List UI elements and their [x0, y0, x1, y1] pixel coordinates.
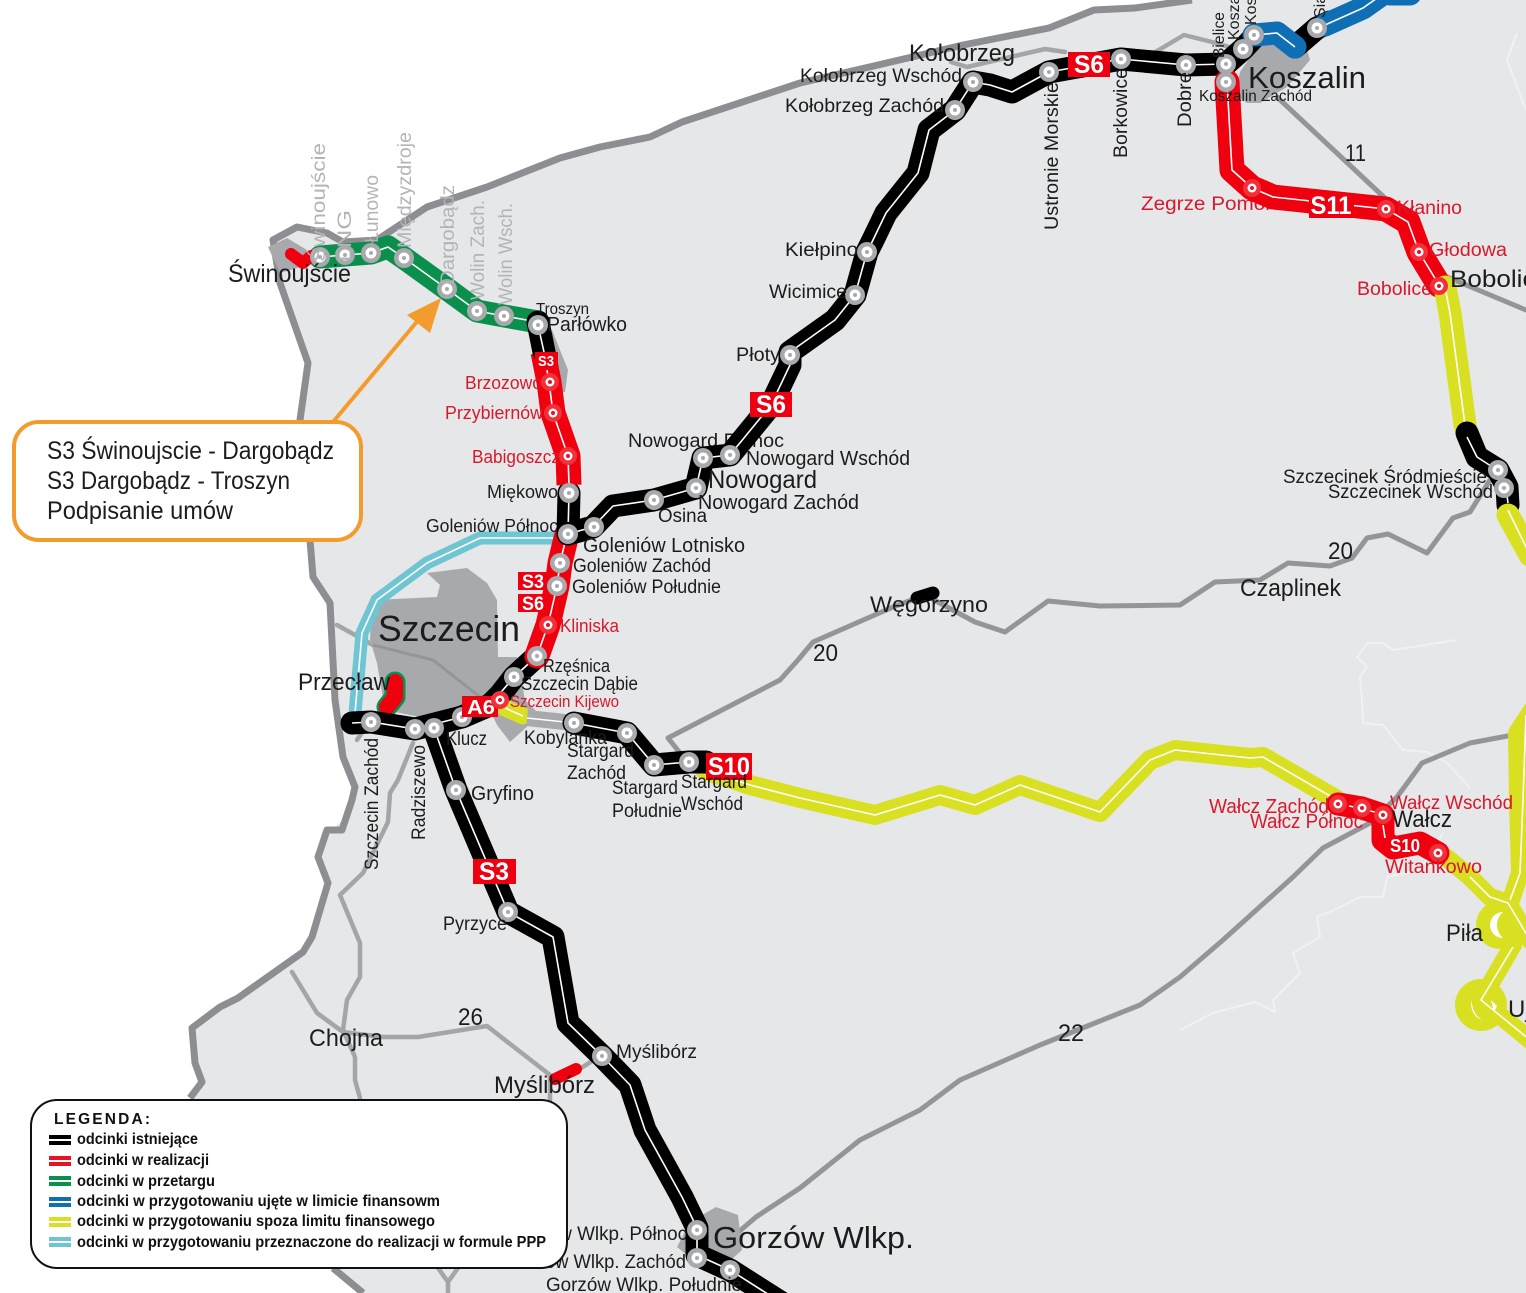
labels: S3 north and Goleniów	[228, 258, 745, 636]
route: S3 green Dargobądz Troszyn	[320, 247, 538, 322]
labels: Wałcz and Piła: Wałcz Północ	[1250, 811, 1363, 833]
road 22	[735, 735, 1513, 1235]
national roads	[292, 35, 1526, 1293]
route: S3 north red	[543, 352, 569, 485]
route: A6 existing	[352, 656, 537, 729]
labels: planned stations (gray vertical): LNG	[335, 210, 356, 262]
labels: S3 south and Gorzów: Chojna	[309, 1025, 384, 1052]
labels: S6: Kiełpino	[785, 240, 858, 261]
labels: Koszalin and S11: Szczecinek Wschód	[1328, 482, 1493, 503]
road north-south west	[340, 743, 458, 1293]
labels: S6: Wicimice	[769, 282, 847, 303]
labels: Szczecin area: Klucz	[446, 729, 487, 750]
route: S6 Koszalin to north-east black	[1226, 22, 1330, 64]
road 20	[668, 480, 1490, 753]
route: Świnoujście red	[291, 254, 311, 263]
station marker: Szczecin Kijewo	[491, 691, 509, 709]
road 26	[292, 972, 600, 1100]
labels: Koszalin and S11: Szczecinek Śródmieście	[1283, 466, 1487, 488]
labels: Koszalin and S11	[813, 60, 1526, 667]
labels: Szczecin area: Rzęśnica	[543, 656, 611, 676]
labels: Szczecin area: Przecław	[298, 669, 391, 696]
badge S3 Goleniów: S3	[522, 572, 544, 593]
labels: Wałcz and Piła: Wałcz Wschód	[1390, 793, 1513, 814]
badge S11: S11	[1310, 192, 1352, 220]
route: S10 yellow	[705, 750, 1337, 815]
labels: Szczecin area: Szczecin Kijewo	[510, 692, 619, 711]
labels: S6	[658, 0, 1329, 527]
city areas	[268, 43, 1310, 1270]
roads near Kołobrzeg	[951, 35, 1240, 67]
route: S11 yellow	[1445, 287, 1465, 425]
labels: planned stations (gray vertical): Dargobądz	[438, 185, 459, 285]
labels: Szczecin area: Stargard	[681, 772, 747, 793]
labels: S3 south and Gorzów: Gorzów Wlkp. Północ	[507, 1224, 687, 1245]
Szczecin roads on area	[373, 645, 480, 697]
Nowogard Północ label: Nowogard Północ	[628, 431, 784, 452]
labels: Koszalin and S11: Głodowa	[1429, 240, 1507, 261]
route: S11 black Szczecinek	[1467, 433, 1508, 505]
labels: Szczecin area: Szczecin Zachód	[362, 738, 383, 870]
labels: S6: Kołobrzeg Zachód	[785, 96, 944, 117]
labels: S3 south and Gorzów: Gorzów Wlkp. Zachód	[505, 1252, 686, 1273]
legend	[31, 1100, 567, 1268]
labels: Wałcz and Piła: Witankowo	[1385, 857, 1482, 878]
labels: S6: Nowogard Wschód	[746, 448, 910, 470]
legend: in preparation within limit: odcinki w przygotowaniu ujęte w limicie finansowm	[77, 1193, 440, 1210]
labels: Wałcz and Piła: Wałcz	[1392, 806, 1452, 833]
labels: Wałcz and Piła: Piła	[1446, 920, 1484, 947]
route: S10 Wałcz red	[1338, 804, 1438, 853]
labels: S3 north and Goleniów: Przybiernów	[445, 403, 544, 423]
labels: S3 south and Gorzów: Pyrzyce	[443, 914, 507, 935]
labels: Szczecin area: Szczecin	[378, 608, 520, 649]
labels: S3 north and Goleniów: Goleniów Zachód	[573, 556, 711, 577]
legend: existing sections: odcinki istniejące	[77, 1131, 198, 1148]
route: Szczecin Kijewo yellow section	[505, 708, 523, 716]
labels: S6: Nowogard Zachód	[698, 492, 859, 514]
labels: Koszalin and S11: 20	[1328, 538, 1353, 565]
labels: S6: Bielice	[1211, 12, 1228, 58]
labels: Szczecin area: Kobylanka	[524, 728, 607, 749]
labels: Szczecin area: Radziszewo	[409, 745, 430, 840]
roads through Szczecin	[337, 625, 480, 740]
route: S10 existing Stargard	[574, 723, 706, 765]
route: Przecław section	[387, 682, 395, 707]
labels: S6: Dobre	[1175, 72, 1196, 127]
labels: Koszalin and S11: Czaplinek	[1240, 575, 1342, 602]
route: Węgorzyno black	[917, 593, 933, 598]
labels: S3 north and Goleniów: Kliniska	[560, 616, 620, 636]
route: S6 existing	[568, 59, 1226, 534]
legend: under construction: odcinki w realizacji	[77, 1152, 209, 1169]
labels: S3 south and Gorzów: Gorzów Wlkp.	[713, 1220, 914, 1255]
route: Myślibórz red	[555, 1069, 576, 1079]
labels: S3 north and Goleniów: Świnoujście	[228, 258, 351, 288]
badge S6 north: S6	[1074, 51, 1104, 79]
legend: in preparation outside limit: odcinki w przygotowaniu spoza limitu finansowego	[77, 1213, 435, 1230]
Świnoujście area	[268, 238, 307, 273]
labels: S6: Kołobrzeg	[909, 40, 1015, 67]
route: S3 Troszyn black	[538, 322, 544, 352]
callout: S3 contracts: S3 Świnoujscie - Dargobądz	[47, 435, 334, 465]
labels: Koszalin and S11: 20	[813, 640, 838, 667]
route: S3 S6 Goleniów red	[537, 534, 567, 656]
Koszalin area	[1235, 43, 1310, 103]
labels: Wałcz and Piła: Wałcz Zachód	[1209, 796, 1329, 818]
badge A6	[462, 696, 498, 719]
badge S6 Goleniów: S6	[522, 594, 544, 615]
labels: Szczecin area: Stargard	[567, 741, 634, 762]
labels: planned stations (gray vertical): Łunowo	[362, 175, 383, 243]
route: S3 south existing	[434, 728, 785, 1293]
route: S11 yellow south	[1508, 510, 1526, 555]
route: S3 PPP west Szczecin	[355, 538, 556, 713]
labels: S3 north and Goleniów: Babigoszcz	[472, 447, 560, 467]
labels: Wałcz and Piła	[1209, 793, 1526, 1023]
labels: Koszalin and S11: Kłanino	[1397, 198, 1462, 219]
voivodeship borders	[1180, 33, 1526, 1030]
route: S10 yellow east of Piła	[1447, 710, 1526, 1040]
labels: Szczecin area: Południe	[612, 801, 682, 822]
callout: S3 contracts: S3 Dargobądz - Troszyn	[47, 467, 290, 495]
route: S3 black Miękowo	[568, 493, 569, 534]
badge A6: A6	[467, 697, 495, 719]
badge S10 Stargard: S10	[708, 753, 750, 781]
route: S6 blue sections	[1254, 0, 1410, 47]
labels under routes	[628, 194, 1309, 452]
labels: S3 north and Goleniów: Goleniów Lotnisko	[583, 535, 745, 557]
Gorzów area	[677, 1207, 742, 1270]
labels: S3 south and Gorzów: Myślibórz	[494, 1072, 595, 1099]
labels: S3 north and Goleniów: Miękowo	[487, 482, 558, 502]
arrow: callout to Dargobądz	[333, 298, 441, 422]
labels: S3 north and Goleniów: Troszyn	[536, 301, 589, 318]
labels: S6: Płoty	[736, 345, 781, 366]
labels: Szczecin area: Zachód	[567, 763, 626, 784]
labels: planned stations (gray vertical): Świnoujście	[308, 143, 330, 262]
legend title: LEGENDA:	[54, 1111, 150, 1128]
callout: S3 contracts	[14, 422, 361, 540]
badge S3 small: S3	[538, 353, 554, 370]
badge S10 Wałcz: S10	[1390, 836, 1420, 856]
labels: planned stations (gray vertical)	[308, 132, 517, 305]
labels: planned stations (gray vertical): Wolin Zach.	[468, 200, 489, 300]
labels: S3 south and Gorzów: 26	[458, 1004, 483, 1031]
labels: S3 north and Goleniów: Parłówko	[547, 314, 627, 336]
labels: Koszalin and S11: 11	[1345, 140, 1366, 167]
labels: Szczecin area	[298, 608, 747, 870]
station markers	[310, 18, 1514, 1280]
legend: PPP: odcinki w przygotowaniu przeznaczone do realizacji w formule PPP	[77, 1234, 546, 1251]
Szczecin area	[370, 568, 540, 742]
labels: Koszalin and S11: Koszalin Zachód	[1199, 88, 1312, 105]
callout: S3 contracts: Podpisanie umów	[47, 497, 234, 525]
road badges	[462, 51, 1422, 886]
road east of Bobolice	[1447, 277, 1526, 310]
labels: Szczecin area: Stargard	[612, 778, 678, 799]
labels: S3 south and Gorzów	[309, 914, 1084, 1293]
labels: S3 north and Goleniów: Brzozowo	[465, 373, 542, 393]
labels: Koszalin and S11: Węgorzyno	[870, 592, 988, 617]
labels: S3 north and Goleniów: Goleniów Północ	[426, 516, 558, 536]
badge S6 Płoty: S6	[756, 391, 786, 419]
Zegrze Pomorskie label: Zegrze Pomorskie	[1141, 194, 1309, 215]
labels: Koszalin and S11: Bobolice	[1357, 279, 1432, 300]
coastline and western border	[190, 0, 1192, 1293]
labels: S6: Osina	[658, 506, 707, 527]
labels: S6: Kołobrzeg Wschód	[800, 66, 962, 87]
labels: S3 south and Gorzów: 22	[1058, 1020, 1084, 1047]
labels: planned stations (gray vertical): Wolin Wsch.	[496, 203, 517, 305]
labels: Koszalin and S11: Koszalin	[1248, 60, 1366, 95]
labels: S6: Borkowice	[1111, 68, 1132, 158]
labels: planned stations (gray vertical): Międzyzdroje	[395, 132, 416, 248]
labels: S3 south and Gorzów: Myślibórz	[616, 1042, 697, 1063]
road 11	[1277, 97, 1387, 200]
labels: S6: Nowogard	[708, 466, 817, 494]
route: S11 red	[1227, 82, 1439, 285]
labels: Szczecin area: Wschód	[681, 794, 743, 815]
legend: in tender: odcinki w przetargu	[77, 1173, 215, 1190]
Parłówko area	[548, 330, 568, 392]
labels: Szczecin area: Gryfino	[471, 783, 534, 805]
badge S3 south: S3	[479, 858, 509, 886]
labels: S6: Ustronie Morskie	[1042, 82, 1063, 230]
route: S10 gray section	[527, 718, 574, 723]
labels: S3 north and Goleniów: Goleniów Południe	[572, 577, 721, 598]
labels: Szczecin area: Szczecin Dąbie	[521, 674, 638, 695]
